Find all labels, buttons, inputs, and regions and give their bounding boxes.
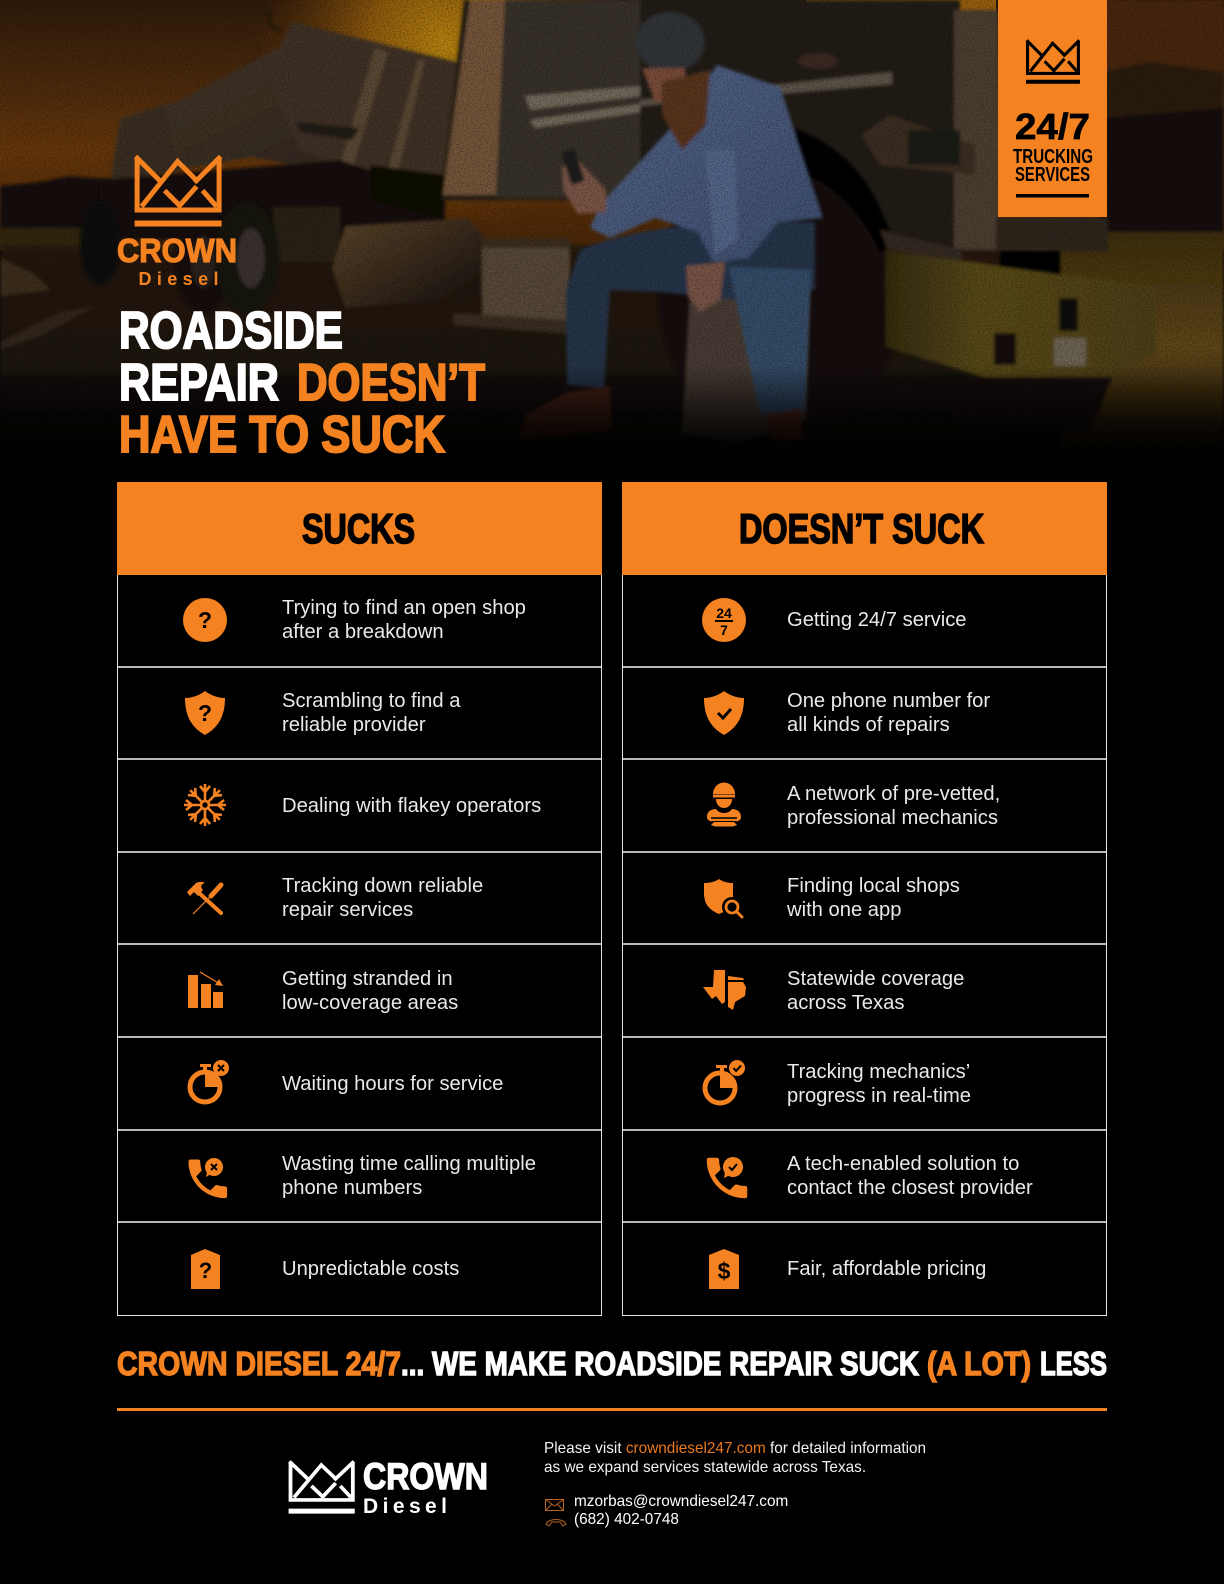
text: low-coverage areas xyxy=(282,992,458,1014)
text: with one app xyxy=(787,899,901,921)
text: reliable provider xyxy=(282,714,426,736)
row: tech-enabled xyxy=(623,1129,1106,1222)
fade to black xyxy=(0,365,1224,457)
row: open shop xyxy=(183,596,526,642)
text xyxy=(282,968,458,1014)
text: professional mechanics xyxy=(787,807,998,829)
text xyxy=(787,968,964,1014)
icon: shield search xyxy=(704,879,744,919)
text: Waiting hours for service xyxy=(282,1072,503,1094)
row: one phone number xyxy=(623,666,1106,759)
text: progress in real-time xyxy=(787,1084,971,1106)
sky xyxy=(0,0,1224,250)
badge crown icon xyxy=(1026,40,1080,82)
right hills and grass xyxy=(1060,0,1224,462)
footer info text xyxy=(544,1440,926,1476)
text xyxy=(282,690,460,736)
text: A tech-enabled solution to xyxy=(787,1153,1019,1175)
text: Trying to find an open shop xyxy=(282,596,526,618)
heading: doesn't suck xyxy=(622,482,1107,575)
text xyxy=(787,690,990,736)
text: Scrambling to find a xyxy=(282,690,460,712)
truck cab xyxy=(441,0,1108,280)
row: local shops xyxy=(623,851,1106,944)
wordmark crown: CROWN xyxy=(117,232,237,269)
icon: price tag dollar xyxy=(709,1249,739,1289)
row: pre-vetted mechanics xyxy=(623,758,1106,852)
crown diesel logo xyxy=(117,154,237,289)
panel: sucks xyxy=(117,482,602,1316)
text: contact the closest provider xyxy=(787,1177,1033,1199)
row: fair pricing xyxy=(623,1221,1106,1315)
dump trailer xyxy=(100,12,460,262)
text: Getting stranded in xyxy=(282,968,453,990)
heading: sucks: SUCKS xyxy=(302,505,415,552)
icon: phone with check bubble xyxy=(706,1157,748,1198)
bumper xyxy=(885,250,1156,432)
title line 2 white: REPAIR xyxy=(119,354,279,412)
icon: stopwatch with check xyxy=(702,1060,745,1106)
email: mzorbas@crowndiesel247.com xyxy=(574,1493,788,1510)
footer info text: as we expand services statewide across Texas. xyxy=(544,1459,866,1476)
footer logo xyxy=(288,1456,488,1518)
text: Statewide coverage xyxy=(787,968,964,990)
front wheel and fender xyxy=(658,128,962,443)
main title xyxy=(119,302,486,464)
wordmark diesel: Diesel xyxy=(138,269,218,289)
icon: envelope xyxy=(545,1499,564,1511)
text: A network of pre-vetted, xyxy=(787,783,1000,805)
footer crown icon xyxy=(289,1461,355,1511)
icon: shield question: ? xyxy=(198,700,212,726)
text: Wasting time calling multiple xyxy=(282,1153,536,1175)
footer contact xyxy=(545,1493,788,1528)
text: Tracking mechanics’ xyxy=(787,1060,970,1082)
icon: phone with x bubble xyxy=(188,1158,228,1198)
heading: sucks xyxy=(117,482,602,575)
left tree line and road xyxy=(0,176,1000,460)
phone number: (682) 402-0748 xyxy=(574,1511,679,1528)
text xyxy=(787,1060,971,1106)
trailer wheels xyxy=(80,201,279,314)
text: after a breakdown xyxy=(282,620,444,642)
icon: mechanic with wrench xyxy=(707,782,741,826)
text xyxy=(787,875,960,921)
tagline xyxy=(117,1345,1107,1383)
icon: snowflake xyxy=(184,784,226,826)
icon: 24/7 circle: 24 xyxy=(716,605,732,621)
row: statewide coverage xyxy=(623,943,1106,1037)
text: Tracking down reliable xyxy=(282,875,483,897)
badge: 24/7 trucking services xyxy=(998,0,1107,217)
panel: doesn't suck xyxy=(622,482,1107,1316)
row: tracking progress xyxy=(623,1036,1106,1130)
text: Fair, affordable pricing xyxy=(787,1258,986,1280)
icon: question circle: ? xyxy=(198,607,212,633)
driver xyxy=(519,12,823,440)
title line 1: ROADSIDE xyxy=(119,302,343,360)
icon: stopwatch with x xyxy=(188,1060,229,1104)
badge 24/7: 24/7 xyxy=(1015,106,1090,147)
row: flakey operators xyxy=(118,758,601,852)
footer wordmark diesel: Diesel xyxy=(363,1495,447,1518)
text: Finding local shops xyxy=(787,875,960,897)
row: multiple phone numbers xyxy=(118,1129,601,1222)
icon: 24/7 circle xyxy=(702,598,746,642)
row: waiting hours xyxy=(118,1036,601,1130)
row: unpredictable costs xyxy=(118,1221,601,1315)
text: One phone number for xyxy=(787,690,990,712)
text xyxy=(787,1153,1033,1199)
seated tank under driver xyxy=(682,278,810,442)
text: Dealing with flakey operators xyxy=(282,795,541,817)
text xyxy=(282,1153,536,1199)
icon: falling bar chart xyxy=(188,972,223,1008)
icon: shield question xyxy=(185,691,225,735)
icon: price tag question xyxy=(191,1249,220,1289)
row: repair services xyxy=(118,851,601,944)
text: repair services xyxy=(282,899,413,921)
icon: texas map xyxy=(703,970,746,1010)
footer info text: Please visit crowndiesel247.com for detailed information xyxy=(544,1440,926,1457)
icon: phone xyxy=(545,1519,567,1527)
text: across Texas xyxy=(787,992,904,1014)
heading: doesn't suck: DOESN’T SUCK xyxy=(739,505,984,552)
icon: hammer and screwdriver xyxy=(187,882,224,916)
crown icon xyxy=(135,156,222,224)
text xyxy=(787,783,1000,829)
fuel tank and step xyxy=(332,218,570,334)
tagline middle: ... WE MAKE ROADSIDE REPAIR SUCK xyxy=(401,1345,919,1382)
text: all kinds of repairs xyxy=(787,714,950,736)
text: Unpredictable costs xyxy=(282,1258,459,1280)
icon: shield check xyxy=(704,691,744,735)
text xyxy=(282,875,483,921)
tagline a lot: (A LOT) xyxy=(927,1345,1031,1382)
text: phone numbers xyxy=(282,1177,422,1199)
text xyxy=(282,596,526,642)
row: reliable provider xyxy=(118,666,601,759)
icon: price tag question: ? xyxy=(199,1258,212,1283)
hero photo: truck and driver at sunset xyxy=(0,0,1224,440)
row: 24/7 service xyxy=(702,598,967,642)
icon: 24/7 circle: 7 xyxy=(720,622,728,638)
icon: question circle xyxy=(183,598,227,642)
text: Getting 24/7 service xyxy=(787,608,967,630)
row: low coverage xyxy=(118,943,601,1037)
title line 3: HAVE TO SUCK xyxy=(119,406,445,464)
tagline brand: CROWN DIESEL 24/7 xyxy=(117,1345,401,1382)
icon: price tag dollar: $ xyxy=(718,1258,731,1284)
